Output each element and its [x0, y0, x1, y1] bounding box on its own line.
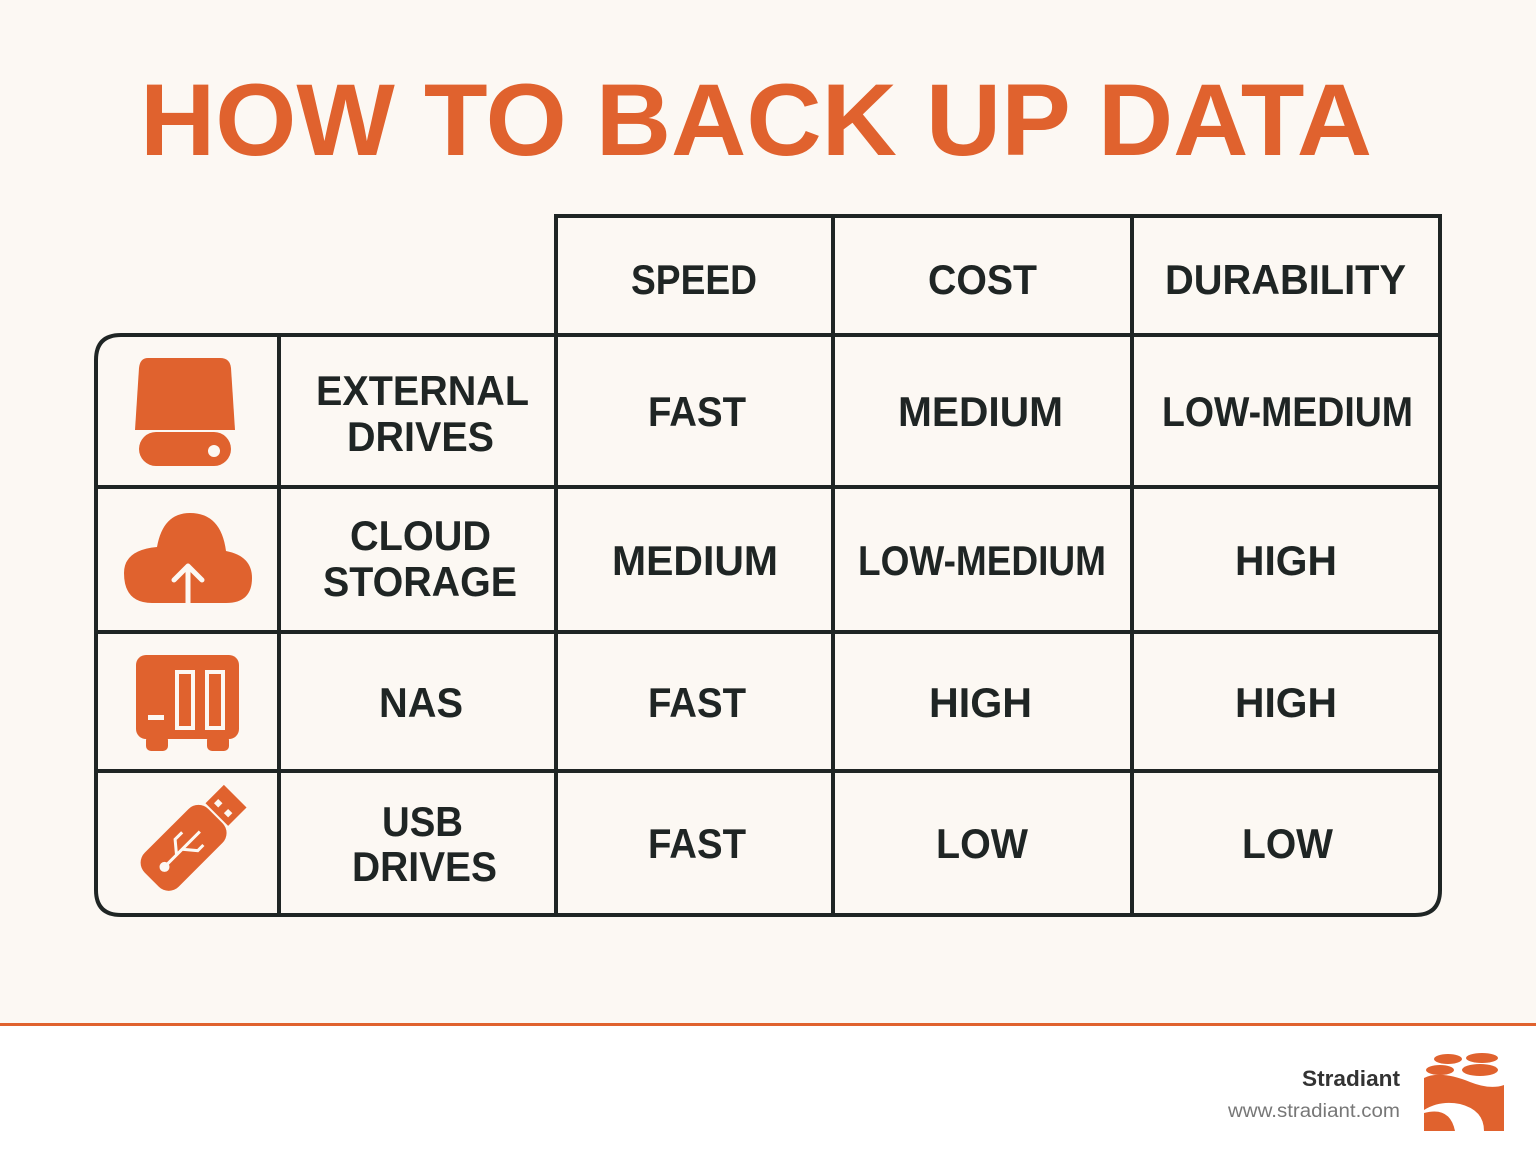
header row: COST — [928, 256, 1037, 303]
row: USB drives — [352, 798, 1333, 890]
icon: NAS — [136, 655, 239, 751]
icon: USB drive — [135, 779, 252, 897]
icon: cloud upload — [124, 513, 252, 603]
row: cloud storage — [323, 512, 1337, 605]
brand text — [1227, 1066, 1401, 1122]
brand text: Stradiant — [1302, 1066, 1401, 1091]
header row: DURABILITY — [1165, 256, 1406, 303]
header row — [631, 256, 1406, 303]
divider line — [0, 1023, 1536, 1026]
row: cloud storage: LOW-MEDIUM — [858, 537, 1106, 584]
row: cloud storage: CLOUD — [350, 512, 491, 559]
row: external drives: DRIVES — [347, 413, 494, 460]
row: NAS — [379, 679, 1337, 726]
row: USB drives: LOW — [1242, 820, 1333, 867]
title: HOW TO BACK UP DATA — [140, 63, 1372, 177]
row: external drives — [316, 367, 1413, 460]
row: external drives: LOW-MEDIUM — [1162, 388, 1413, 435]
row: NAS: HIGH — [929, 679, 1032, 726]
comparison table — [96, 216, 1440, 915]
row: USB drives: LOW — [936, 820, 1028, 867]
header row: SPEED — [631, 256, 757, 303]
icon: external drive — [135, 358, 235, 466]
row: NAS: HIGH — [1235, 679, 1337, 726]
row: cloud storage: STORAGE — [323, 558, 517, 605]
row: NAS: NAS — [379, 679, 463, 726]
row: NAS: FAST — [648, 679, 746, 726]
row: external drives: EXTERNAL — [316, 367, 529, 414]
row: cloud storage: MEDIUM — [612, 537, 778, 584]
row: USB drives: FAST — [648, 820, 746, 867]
row: external drives: MEDIUM — [898, 388, 1063, 435]
row: external drives: FAST — [648, 388, 746, 435]
row: cloud storage: HIGH — [1235, 537, 1337, 584]
logo — [1424, 1053, 1504, 1131]
row: USB drives: DRIVES — [352, 843, 497, 890]
brand text: www.stradiant.com — [1227, 1101, 1400, 1122]
row: USB drives: USB — [382, 798, 463, 845]
